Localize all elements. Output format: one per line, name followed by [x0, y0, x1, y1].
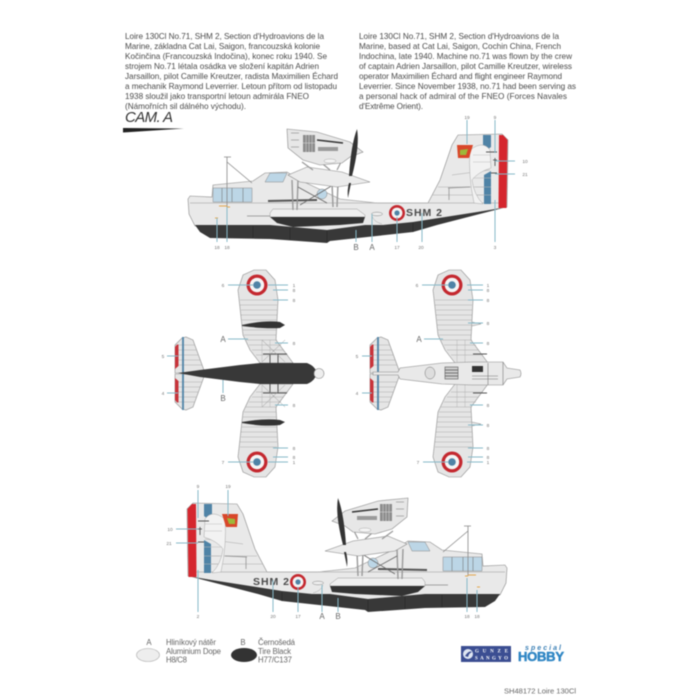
callouts: right profile: 21 [522, 172, 528, 178]
text block: English description [359, 32, 576, 111]
callouts: underside: 8 [293, 298, 296, 304]
callouts: right profile: B [353, 243, 359, 252]
floats [242, 321, 287, 426]
text block: Czech description: 1938 sloužil jako transportní letoun admirála FNEO [125, 92, 309, 101]
callouts: left profile: 19 [225, 484, 231, 490]
fuselage code: SHM 2: SHM 2 [253, 576, 289, 588]
callouts: top view: 1 [487, 283, 490, 289]
callouts: right profile: 18 [224, 245, 230, 251]
callouts: left profile: 18 [464, 614, 470, 620]
callouts: right profile: 3 [494, 245, 497, 251]
text block: Czech description [125, 32, 338, 111]
callouts: left profile: 9 [197, 484, 200, 490]
legend: colour A aluminium dope: H8/C8 [166, 656, 187, 664]
callouts: top view: 8 [487, 321, 490, 327]
callouts: left profile: A [319, 612, 325, 621]
callouts: underside: 4 [162, 391, 165, 397]
callouts: underside: 8 [293, 341, 296, 347]
text block: English description: operator Maximilien Échard and flight engineer Raymond [359, 71, 562, 81]
legend: colour B tire black [231, 638, 296, 664]
callouts: right profile: 10 [522, 159, 528, 165]
callouts: top view: 5 [356, 354, 359, 360]
callouts: top view: 7 [417, 460, 420, 466]
callouts: underside: 5 [162, 354, 165, 360]
callouts: top view: 6 [416, 283, 419, 289]
callouts: right profile: 17 [394, 245, 400, 251]
logo: Gunze Sangyo [461, 646, 511, 662]
callouts: right profile: 18 [214, 245, 220, 251]
callouts: right profile: A [369, 243, 375, 252]
callouts: underside: 8 [293, 446, 296, 452]
legend: colour B tire black: Černošedá [258, 638, 296, 647]
callouts: top view [356, 283, 490, 466]
side view: right profile [188, 115, 528, 252]
callouts: right profile: 9 [494, 115, 497, 121]
text block: English description: d'Extrême Orient). [359, 102, 423, 111]
callouts: left profile: 20 [270, 614, 276, 620]
callouts: underside: 1 [293, 283, 296, 289]
callouts: underside: 1 [293, 460, 296, 466]
callouts: left profile: B [335, 612, 341, 621]
text block: Czech description: Kočinčina (Francouzská Indočina), konec roku 1940. Se [125, 52, 327, 61]
callouts: top view: 8 [487, 455, 490, 461]
callouts: left profile: 17 [295, 614, 301, 620]
side view: left profile [166, 484, 507, 621]
text block: Czech description: a mechanik Raymond Leverrier. Letoun přítom od listopadu [125, 82, 337, 91]
callouts: right profile: 19 [464, 115, 470, 121]
callouts: underside: 7 [222, 460, 225, 466]
nose spinner [314, 368, 324, 378]
text block: Czech description: strojem No.71 létala osádka ve složení kapitán Adrien [125, 62, 319, 71]
callouts: left profile: 10 [167, 527, 173, 533]
callouts: left profile: 2 [197, 614, 200, 620]
logo: Special Hobby: special [525, 645, 562, 652]
text block: Czech description: Marine, základna Cat Lai, Saigon, francouzská kolonie [125, 42, 320, 51]
product code: SH48172 Loire 130Cl [504, 686, 576, 696]
legend: colour A aluminium dope: Hliníkový nátěr [166, 638, 216, 647]
underside view [162, 270, 324, 477]
fuselage code: SHM 2: SHM 2 [406, 207, 442, 219]
callouts: top view: 8 [487, 403, 490, 409]
legend: colour A aluminium dope [136, 638, 221, 664]
text block: Czech description: Loire 130Cl No.71, SHM 2, Section d'Hydroavions de la [125, 32, 324, 41]
text block: Czech description: (Námořních sil dálného východu). [125, 102, 246, 111]
callouts: top view: 8 [487, 341, 490, 347]
callouts: top view: A [416, 335, 422, 344]
callouts: left profile: 18 [474, 614, 480, 620]
callouts: top view: 8 [487, 446, 490, 452]
callouts: right profile: 20 [418, 245, 424, 251]
legend: colour B tire black: B [240, 638, 246, 647]
callouts: left profile: 21 [166, 541, 172, 547]
text block: English description: a personal hack of admiral of the FNEO (Forces Navales [359, 92, 567, 101]
heading: CAM. A [123, 109, 184, 132]
callouts: underside: 8 [293, 403, 296, 409]
callouts: top view: 8 [487, 298, 490, 304]
legend: colour B tire black: Tire Black [258, 647, 291, 656]
callouts: left profile [166, 484, 480, 621]
text block: English description: Loire 130Cl No.71, SHM 2, Section d'Hydroavions de la [359, 32, 559, 41]
fuselage from above [373, 322, 521, 426]
callouts: top view: 4 [356, 391, 359, 397]
legend: colour B tire black: H77/C137 [258, 656, 292, 664]
text block: Czech description: Jarsaillon, pilot Camille Kreutzer, radista Maximilien Échard [125, 71, 338, 81]
text block: English description: Leverrier. Since November 1938, no.71 had been serving as [359, 82, 576, 91]
text block: English description: Indochina, late 1940. Machine no.71 was flown by the crew [359, 52, 572, 61]
dark hull [178, 363, 317, 384]
legend: colour A aluminium dope: A [146, 638, 152, 647]
heading: CAM. A: CAM. A [125, 109, 173, 126]
text block: English description: of captain Adrien Jarsaillon, pilot Camille Kreutzer, wireless [359, 62, 572, 71]
callouts: underside [162, 283, 296, 466]
callouts: underside: A [220, 335, 226, 344]
callouts: underside: 8 [293, 288, 296, 294]
text block: English description: Marine, based at Cat Lai, Saigon, Cochin China, French [359, 42, 561, 51]
logo: Special Hobby: HOBBY [518, 649, 564, 664]
callouts: right profile [214, 115, 528, 252]
callouts: underside: B [220, 394, 226, 403]
callouts: underside: 6 [222, 283, 225, 289]
callouts: top view: 1 [487, 460, 490, 466]
callouts: underside: 8 [293, 455, 296, 461]
callouts: top view: 8 [487, 288, 490, 294]
legend: colour A aluminium dope: Aluminium Dope [166, 647, 221, 656]
logo: Gunze Sangyo: SANGYO [475, 656, 508, 662]
top view [356, 270, 521, 477]
logo: Gunze Sangyo: GUNZE [475, 650, 509, 654]
callouts: top view: 8 [487, 423, 490, 429]
